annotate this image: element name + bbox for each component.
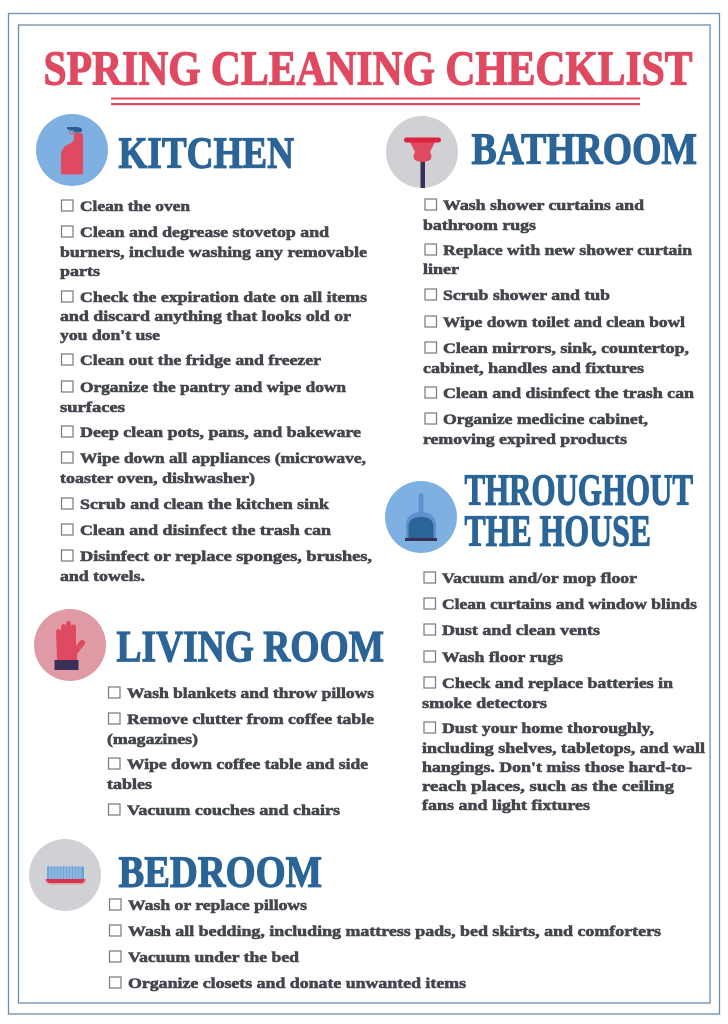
bathroom checklist: Organize medicine cabinet, — [443, 411, 648, 428]
kitchen checklist: Check the expiration date on all items — [80, 289, 367, 306]
panel: living room — [34, 609, 384, 819]
living room checklist: tables — [107, 776, 152, 793]
bedroom checklist: Organize closets and donate unwanted items — [128, 975, 466, 992]
bedroom checklist: Vacuum under the bed — [128, 949, 300, 966]
house checklist: Check and replace batteries in — [442, 675, 674, 692]
heading: kitchen: KITCHEN — [118, 128, 294, 178]
house checklist: reach places, such as the ceiling — [422, 778, 674, 795]
bathroom checklist: Wash shower curtains and — [443, 197, 645, 214]
icon: spray bottle — [36, 114, 108, 186]
living room checklist: Wipe down coffee table and side — [127, 756, 368, 773]
bedroom checklist — [110, 897, 661, 992]
bathroom checklist: Wipe down toilet and clean bowl — [443, 314, 685, 331]
living room checklist: (magazines) — [107, 731, 198, 748]
house checklist — [422, 570, 705, 814]
kitchen checklist: Organize the pantry and wipe down — [80, 379, 347, 396]
bathroom checklist: bathroom rugs — [423, 217, 536, 234]
heading: throughout the house: THE HOUSE — [464, 506, 651, 556]
bathroom checklist — [423, 197, 695, 448]
heading: bedroom: BEDROOM — [118, 846, 322, 896]
kitchen checklist: Clean out the fridge and freezer — [80, 352, 321, 369]
kitchen checklist: burners, include washing any removable — [60, 244, 367, 261]
panel: bedroom — [29, 839, 661, 992]
bedroom checklist: Wash all bedding, including mattress pads, bed skirts, and comforters — [128, 923, 661, 940]
heading: throughout the house — [464, 464, 693, 556]
title double underline — [111, 98, 640, 105]
house checklist: Clean curtains and window blinds — [442, 596, 697, 613]
kitchen checklist: and towels. — [60, 568, 145, 585]
kitchen checklist: Clean and degrease stovetop and — [80, 224, 330, 241]
living room checklist: Remove clutter from coffee table — [127, 711, 374, 728]
kitchen checklist: Clean the oven — [80, 198, 191, 215]
panel: bathroom — [386, 116, 697, 448]
living room checklist — [107, 685, 374, 819]
panel: kitchen — [36, 114, 372, 585]
house checklist: smoke detectors — [422, 695, 547, 712]
house checklist: including shelves, tabletops, and wall — [422, 740, 705, 757]
kitchen checklist: Wipe down all appliances (microwave, — [80, 450, 366, 467]
kitchen checklist: toaster oven, dishwasher) — [60, 470, 255, 487]
house checklist: Dust and clean vents — [442, 622, 600, 639]
bathroom checklist: Clean and disinfect the trash can — [443, 385, 695, 402]
house checklist: Dust your home thoroughly, — [442, 720, 654, 737]
living room checklist: Vacuum couches and chairs — [127, 802, 340, 819]
bathroom checklist: cabinet, handles and fixtures — [423, 360, 644, 377]
house checklist: hangings. Don't miss those hard-to- — [422, 759, 692, 776]
bathroom checklist: Scrub shower and tub — [443, 287, 610, 304]
kitchen checklist: Disinfect or replace sponges, brushes, — [80, 548, 372, 565]
kitchen checklist: you don't use — [60, 327, 160, 344]
kitchen checklist: Clean and disinfect the trash can — [80, 522, 332, 539]
living room checklist: Wash blankets and throw pillows — [127, 685, 374, 702]
kitchen checklist: Scrub and clean the kitchen sink — [80, 496, 330, 513]
bedroom checklist: Wash or replace pillows — [128, 897, 307, 914]
bathroom checklist: removing expired products — [423, 431, 627, 448]
house checklist: Vacuum and/or mop floor — [442, 570, 637, 587]
bathroom checklist: Replace with new shower curtain — [443, 242, 693, 259]
icon: scrub brush — [29, 839, 101, 911]
icon: rubber glove — [34, 609, 106, 681]
kitchen checklist: and discard anything that looks old or — [60, 308, 351, 325]
panel: throughout the house — [385, 464, 705, 814]
kitchen checklist: parts — [60, 263, 100, 280]
heading: living room: LIVING ROOM — [116, 621, 384, 671]
icon: dustpan — [385, 481, 457, 553]
house checklist: Wash floor rugs — [442, 649, 563, 666]
kitchen checklist: Deep clean pots, pans, and bakeware — [80, 424, 361, 441]
icon: plunger — [386, 116, 458, 188]
kitchen checklist — [60, 198, 372, 585]
bathroom checklist: liner — [423, 261, 459, 278]
kitchen checklist: surfaces — [60, 399, 125, 416]
house checklist: fans and light fixtures — [422, 797, 590, 814]
bathroom checklist: Clean mirrors, sink, countertop, — [443, 340, 689, 357]
